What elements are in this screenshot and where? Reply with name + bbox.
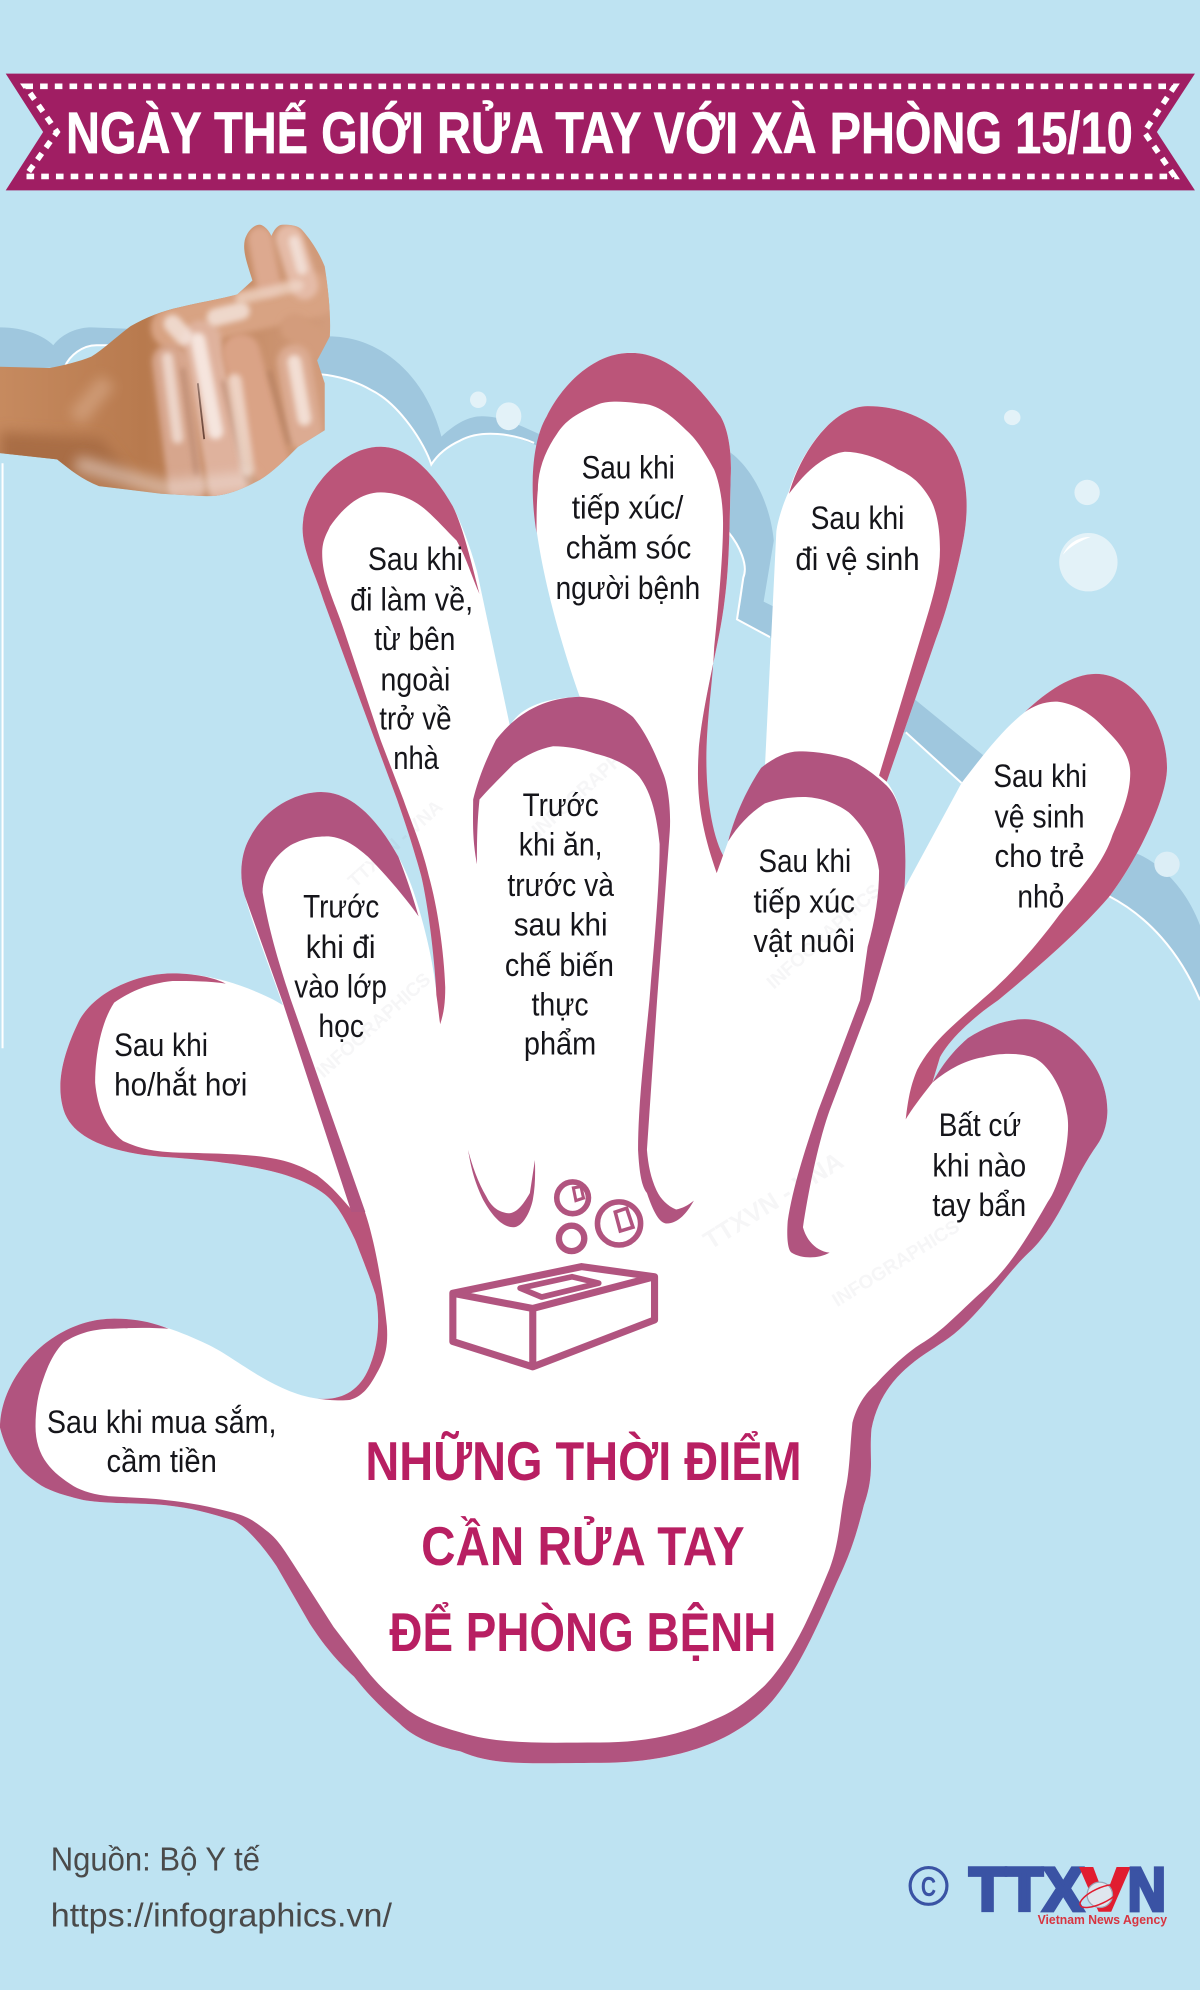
label: after caring for the sick: Sau khi: [582, 449, 675, 485]
label: after shopping: [47, 1403, 277, 1479]
hand outline: crease near soap: [468, 1150, 535, 1227]
hand outline: finger 7: [906, 674, 1167, 1119]
label: before eating: sau khi: [514, 906, 608, 942]
watermark: INFOGRAPHICS: [763, 880, 885, 994]
label: after coughing: Sau khi: [114, 1027, 208, 1063]
watermark: INFOGRAPHICS: [528, 728, 651, 841]
label: after toilet: Sau khi: [811, 500, 904, 536]
watermark: INFOGRAPHICS: [313, 969, 435, 1082]
label: after caring for the sick: người bệnh: [556, 570, 700, 606]
logo: TTXVN: TTX: [969, 1856, 1084, 1924]
label: after child care: [993, 758, 1087, 914]
label: after pets: Sau khi: [759, 843, 851, 879]
icon: bubbles above soap: [557, 1182, 641, 1251]
icon: soap bar: [453, 1267, 655, 1367]
label: after coughing: [114, 1027, 247, 1102]
label: after pets: tiếp xúc: [753, 883, 855, 920]
label: after pets: [753, 843, 855, 959]
label: after child care: nhỏ: [1017, 878, 1064, 914]
label: after shopping: cầm tiền: [107, 1443, 217, 1479]
label: after caring for the sick: [556, 449, 700, 606]
label: after caring for the sick: tiếp xúc/: [572, 489, 683, 525]
label: after child care: Sau khi: [993, 758, 1087, 794]
label: after child care: vệ sinh: [995, 798, 1085, 834]
label: whenever hands are dirty: khi nào: [932, 1147, 1026, 1183]
label: after caring for the sick: chăm sóc: [566, 529, 691, 565]
label: before class: [294, 889, 387, 1044]
hand outline: finger 3: [303, 447, 479, 1024]
label: after work: từ bên: [374, 621, 455, 657]
hand outline: finger 6: [728, 751, 905, 1257]
label: whenever hands are dirty: [932, 1107, 1026, 1223]
copyright symbol: [910, 1868, 947, 1904]
label: whenever hands are dirty: tay bẩn: [932, 1187, 1026, 1223]
decorative cloud band: [0, 327, 1200, 1048]
label: whenever hands are dirty: Bất cứ: [939, 1107, 1021, 1143]
heading: moments to wash hands: [365, 1431, 802, 1663]
label: before eating: khi ăn,: [519, 826, 603, 862]
label: after toilet: [795, 500, 920, 577]
label: before eating: Trước: [523, 787, 599, 823]
source: [51, 1841, 393, 1934]
hand outline: thumb, palm and last finger: [0, 1019, 1107, 1763]
label: after work: Sau khi: [368, 541, 463, 577]
watermark: [313, 728, 963, 1311]
label: after work: nhà: [393, 740, 439, 776]
label: before eating: trước và: [507, 867, 614, 903]
label: before class: vào lớp: [294, 969, 387, 1005]
banner: [6, 74, 1195, 190]
label: after work: ngoài: [381, 661, 450, 697]
label: after work: trở về: [379, 701, 452, 737]
logo: TTXVN: [969, 1856, 1168, 1927]
label: after shopping: Sau khi mua sắm,: [47, 1403, 277, 1440]
logo: TTXVN: V: [1081, 1856, 1129, 1924]
label: before class: Trước: [303, 889, 379, 925]
hand outline: finger 5: [789, 406, 967, 782]
heading: moments to wash hands: ĐỂ PHÒNG BỆNH: [389, 1602, 776, 1663]
hand outline: central finger: [473, 697, 694, 1223]
watermark: TTXVN - VNA: [344, 796, 447, 892]
heading: moments to wash hands: CẦN RỬA TAY: [421, 1516, 745, 1577]
label: before eating: phẩm: [524, 1026, 596, 1062]
label: after toilet: đi vệ sinh: [795, 541, 920, 577]
watermark: TTXVN - VNA: [699, 1147, 849, 1255]
label: before eating: chế biến: [505, 947, 614, 983]
label: after child care: cho trẻ: [995, 838, 1085, 874]
copyright symbol: C: [921, 1871, 936, 1902]
label: before eating: thực: [532, 986, 589, 1022]
heading: moments to wash hands: NHỮNG THỜI ĐIỂM: [365, 1431, 802, 1492]
photo: soapy hands: [0, 224, 330, 496]
label: after work: đi làm về,: [350, 581, 473, 617]
logo: TTXVN: Vietnam News Agency: [1038, 1912, 1168, 1927]
hand outline: finger 1 and neck: [60, 973, 387, 1400]
hand outline: finger 2: [241, 792, 419, 1212]
hand: white silhouette: [0, 353, 1167, 1763]
soap bubbles: [470, 392, 1180, 877]
label: before class: khi đi: [306, 929, 375, 965]
logo: TTXVN: N: [1128, 1856, 1166, 1924]
source: Nguồn: Bộ Y tế: [51, 1841, 260, 1878]
label: before eating: [505, 787, 614, 1062]
label: after pets: vật nuôi: [753, 923, 855, 959]
watermark: INFOGRAPHICS: [829, 1216, 963, 1311]
source: https://infographics.vn/: [51, 1897, 393, 1934]
label: after work: [350, 541, 473, 776]
label: after coughing: ho/hắt hơi: [114, 1065, 247, 1102]
label: before class: học: [318, 1008, 364, 1044]
hand outline: finger 4: [533, 353, 731, 873]
